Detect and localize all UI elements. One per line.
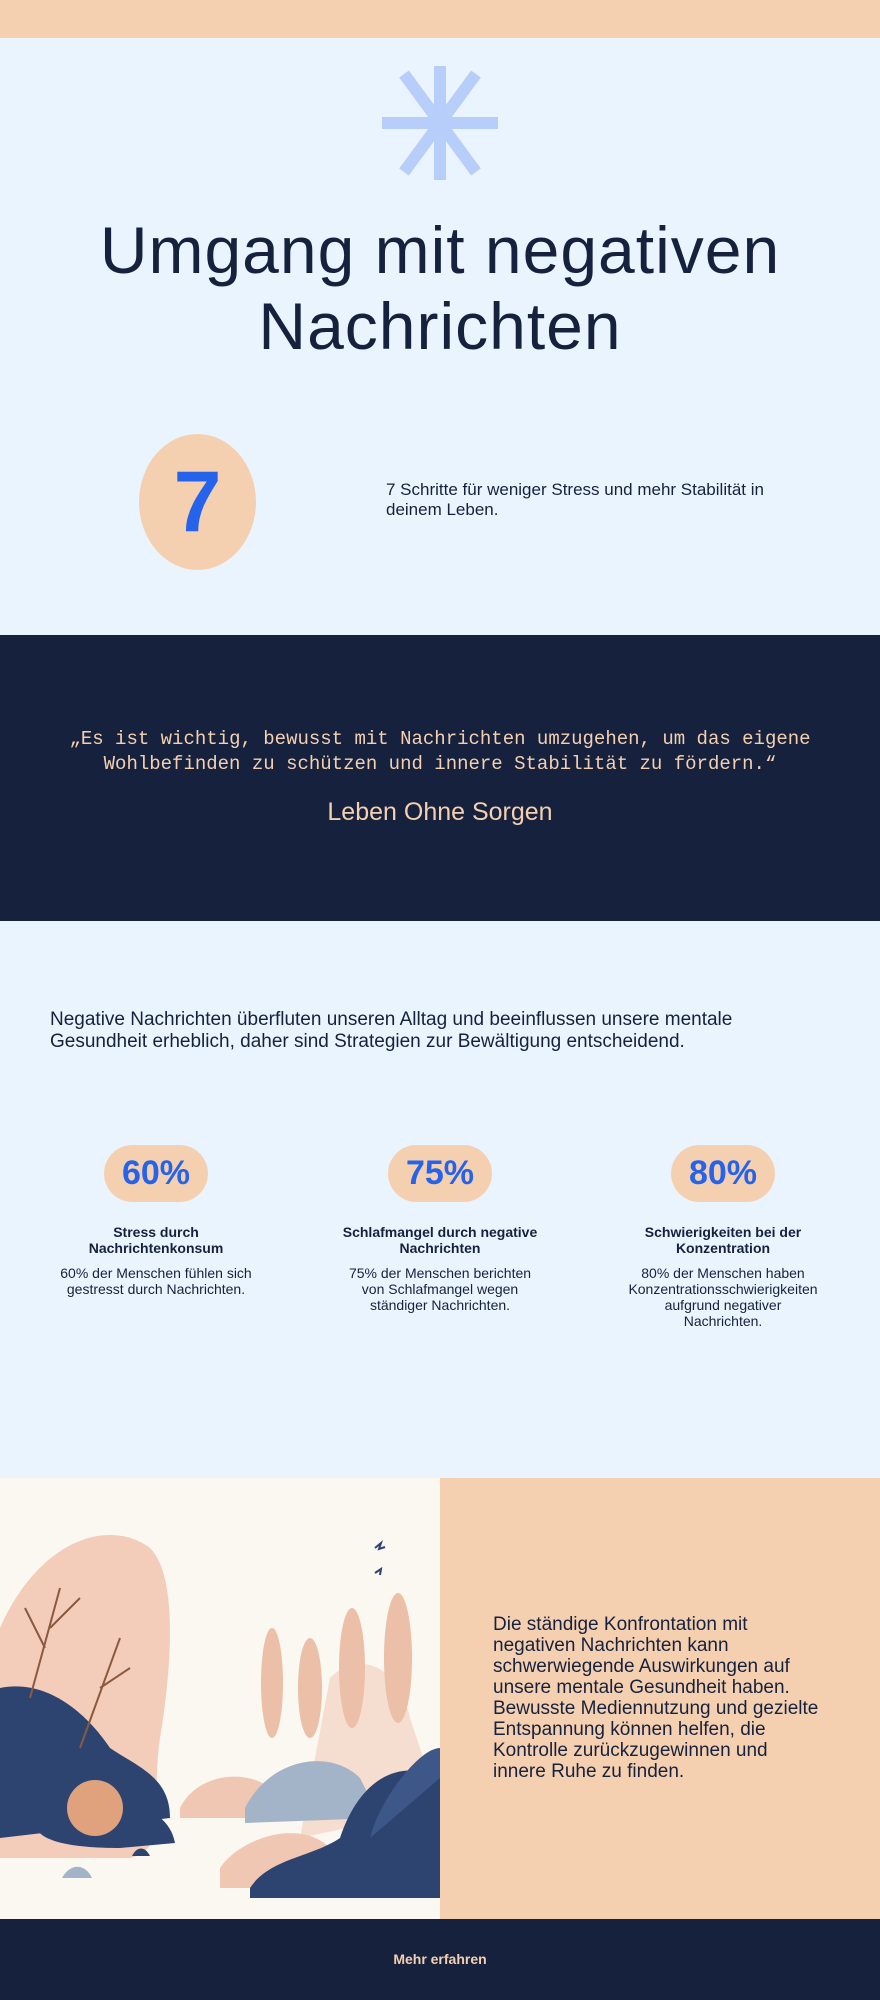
panel: text on peach <box>440 1478 880 1919</box>
stat: 60%: 60% <box>122 1154 190 1192</box>
stat: 80%: aufgrund negativer <box>665 1297 781 1313</box>
stat: 75%: ständiger Nachrichten. <box>370 1297 510 1313</box>
subtitle: 7 Schritte für weniger Stress und mehr Stabilität in deinem Leben. <box>386 480 764 519</box>
badge: 7: 7 <box>174 454 221 550</box>
stat: 60%: Stress durch <box>113 1224 199 1240</box>
stat: 80%: 80% <box>689 1154 757 1192</box>
stat: 75%: Nachrichten <box>400 1240 480 1256</box>
quote text <box>69 728 811 775</box>
top band <box>0 0 880 38</box>
footer <box>0 1919 880 2000</box>
intro paragraph: Negative Nachrichten überfluten unseren Alltag und beeinflussen unsere mentale Gesundheit erheblich, daher sind Strategien zur Bewältigung entscheidend. <box>50 1009 732 1052</box>
icon: asterisk <box>382 66 498 180</box>
quote author: Leben Ohne Sorgen <box>327 798 553 826</box>
quote panel <box>0 635 880 921</box>
stat: 80% <box>628 1145 818 1329</box>
title: Nachrichten <box>258 289 622 363</box>
stat: 75% <box>343 1145 537 1313</box>
stat: 60%: gestresst durch Nachrichten. <box>67 1281 245 1297</box>
title: Umgang mit negativen <box>100 213 780 287</box>
stat: 80%: Konzentration <box>676 1240 770 1256</box>
quote text: Wohlbefinden zu schützen und innere Stabilität zu fördern.“ <box>104 753 776 775</box>
body text: Die ständige Konfrontation mit negativen Nachrichten kann schwerwiegende Auswirkungen auf unsere mentale Gesundheit haben. Bewusste Mediennutzung und gezielte Entspannung können helfen, die Kontrolle zurückzugewinnen und innere Ruhe zu finden. <box>493 1614 818 1782</box>
stat: 80%: Konzentrationsschwierigkeiten <box>628 1281 818 1297</box>
badge: 7 <box>139 434 256 570</box>
stat: 80%: Schwierigkeiten bei der <box>645 1224 801 1240</box>
stat: 60%: Nachrichtenkonsum <box>89 1240 223 1256</box>
footer: Mehr erfahren <box>393 1951 487 1967</box>
stat: 75%: 75% der Menschen berichten <box>349 1265 531 1281</box>
stat: 80%: 80% der Menschen haben <box>641 1265 805 1281</box>
stat: 75%: 75% <box>406 1154 474 1192</box>
stat: 60%: 60% der Menschen fühlen sich <box>60 1265 252 1281</box>
stat: 75%: von Schlafmangel wegen <box>362 1281 518 1297</box>
stat: 80%: Nachrichten. <box>684 1313 762 1329</box>
stat: 60% <box>60 1145 252 1297</box>
stat: 75%: Schlafmangel durch negative <box>343 1224 537 1240</box>
quote text: „Es ist wichtig, bewusst mit Nachrichten umzugehen, um das eigene <box>69 728 811 750</box>
illustration: landscape <box>0 1478 440 1919</box>
title <box>100 213 780 363</box>
